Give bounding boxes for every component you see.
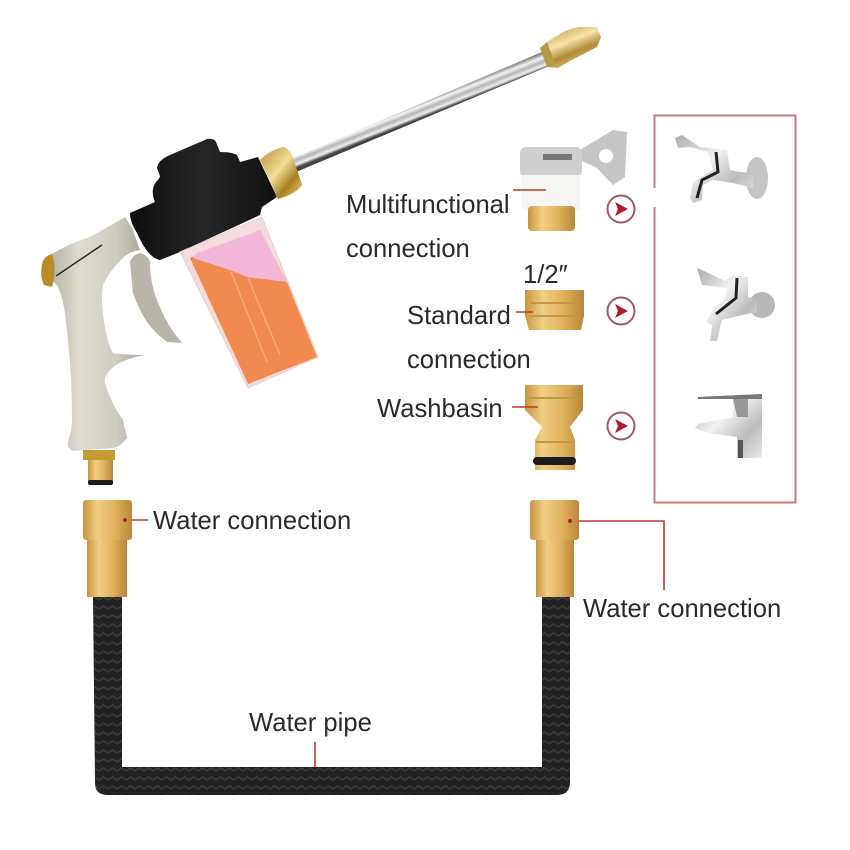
black pump body	[130, 139, 277, 260]
lance tube	[293, 52, 547, 172]
multifunctional connector	[520, 130, 627, 231]
key	[580, 130, 627, 185]
label: Water connection left: Water connection	[153, 507, 351, 535]
label: Standard connection: Standard	[407, 302, 511, 330]
brass nozzle	[540, 27, 601, 68]
icon: garden tap	[697, 268, 775, 341]
arrow: standard	[608, 298, 634, 324]
right brass fitting	[530, 500, 579, 597]
label: 1/2 inch: 1/2″	[523, 261, 568, 289]
brass collar	[260, 147, 302, 199]
label: Washbasin: Washbasin	[377, 395, 503, 423]
standard connector	[525, 290, 584, 330]
trigger	[130, 253, 182, 343]
label: Multifunctional connection: Multifunctional	[346, 191, 510, 219]
faucet panel	[654, 116, 796, 502]
quick connector under grip	[83, 450, 115, 485]
arrow: washbasin	[608, 412, 634, 440]
water hose	[93, 597, 570, 795]
label: Multifunctional connection	[346, 191, 510, 263]
label: Standard connection	[407, 302, 531, 374]
arrow: multifunctional	[608, 196, 634, 222]
washbasin connector	[525, 385, 583, 470]
icon: wall tap	[675, 135, 768, 203]
spray gun	[41, 27, 601, 485]
pointer lines	[125, 190, 664, 768]
label: Multifunctional connection: connection	[346, 235, 470, 263]
label: Water pipe: Water pipe	[249, 709, 372, 737]
brass rear plug	[41, 254, 54, 287]
icon: basin mixer	[695, 394, 762, 458]
grip groove	[56, 245, 102, 276]
label: Water connection right: Water connection	[583, 595, 781, 623]
foam bottle	[180, 217, 318, 388]
left brass fitting	[83, 500, 132, 597]
label: Standard connection: connection	[407, 346, 531, 374]
pistol grip	[50, 217, 145, 451]
